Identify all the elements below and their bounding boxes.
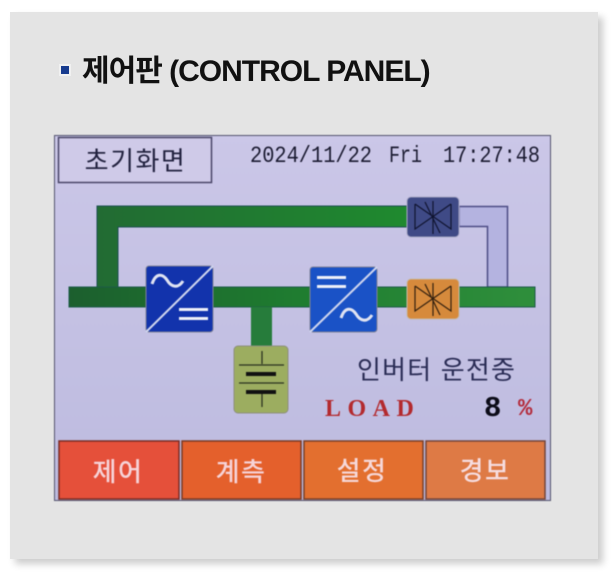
icon: rectifier AC to DC bbox=[146, 266, 213, 332]
button: control bbox=[59, 441, 179, 499]
button: settings bbox=[304, 441, 423, 499]
panel: touch screen bbox=[53, 134, 552, 502]
button: alarm bbox=[426, 441, 545, 499]
load label: LOAD bbox=[325, 396, 420, 422]
weekday: Fri bbox=[389, 143, 422, 170]
screen background bbox=[54, 136, 550, 500]
power lines: green bbox=[69, 206, 535, 347]
button: settings: 설정 bbox=[337, 456, 387, 486]
button: initial screen bbox=[58, 138, 212, 182]
load percent sign: % bbox=[518, 396, 533, 423]
icon: inverter switch bbox=[407, 279, 459, 319]
bullet marker bbox=[59, 64, 71, 76]
date: 2024/11/22 bbox=[250, 143, 372, 170]
icon: bypass switch bbox=[407, 197, 459, 237]
menu buttons bbox=[59, 441, 545, 499]
button: alarm: 경보 bbox=[460, 456, 510, 486]
icon: battery bbox=[234, 346, 288, 413]
bypass line: inactive bbox=[459, 206, 508, 287]
title: 제어판 (CONTROL PANEL) bbox=[82, 55, 430, 88]
button: initial screen: 초기화면 bbox=[85, 146, 186, 176]
button: control: 제어 bbox=[93, 457, 143, 487]
button: measurement bbox=[182, 441, 301, 499]
status text: 인버터 운전중 bbox=[357, 355, 516, 385]
load value: 8 bbox=[484, 392, 501, 425]
button: measurement: 계측 bbox=[216, 457, 266, 487]
icon: inverter DC to AC bbox=[310, 267, 377, 332]
